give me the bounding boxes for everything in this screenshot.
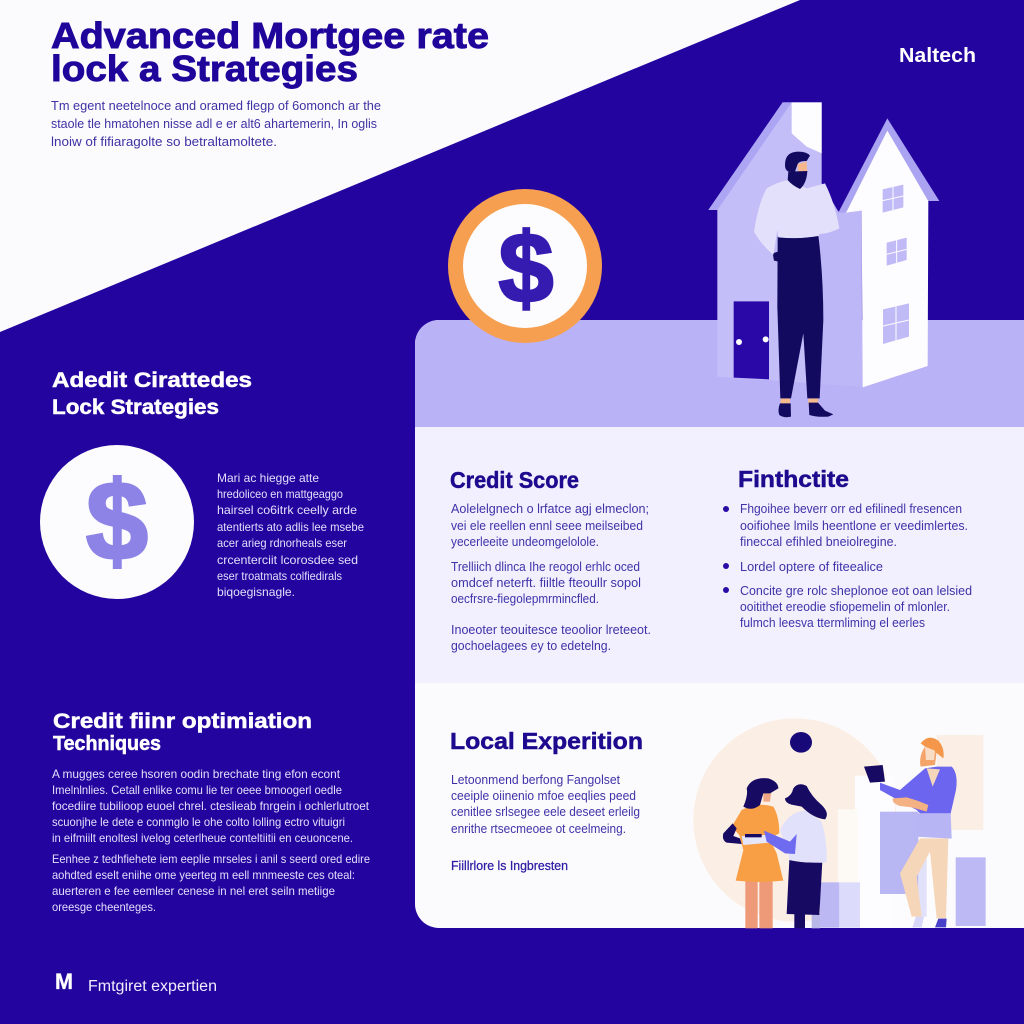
text block: lock strategies: hairsel co6itrk ceelly arde [217,503,357,517]
section heading: lock strategies: Lock Strategies [52,396,219,419]
woman in orange dress [723,778,783,928]
intro text block: staole tle hmatohen nisse adl e er alt6 ahartemerin, In oglis [51,116,377,131]
door [734,301,769,379]
panel: local experition [450,728,643,873]
credit score text: yecerleeite undeomgelolole. [451,535,599,549]
right house [838,118,939,387]
left house [708,102,862,387]
footer logo and label: M [55,969,73,994]
local experition text: ceeiple oiinenio mfoe eeqlies peed [451,789,636,803]
section heading: optimisation techniques [53,710,312,755]
bullet list: ooifiohee lmils heentlone er veedimlertes. [740,519,968,533]
panel: fintech list [723,466,972,630]
text block: techniques: focediire tubilioop euoel chrel. cteslieab fnrgein i ochlerlutroet [52,799,370,813]
brand name: Naltech [899,45,976,67]
bullet list: ooitithet ereodie sfiopemelin of mlonler. [740,600,950,614]
woman in white top [742,784,827,928]
local experition text: enrithe rtsecmeoee ot ceelmeing. [451,822,626,836]
icon: white dollar circle: $ [86,459,148,583]
bullet list: Fhgoihee beverr orr ed efilinedl fresencen [740,502,962,516]
section heading: lock strategies: Adedit Cirattedes [52,369,252,392]
credit score text: oecfrsre-fiegolepmrmincfled. [451,592,599,606]
footer logo and label [55,969,217,995]
text block: lock strategies [217,471,364,599]
credit score text [451,502,651,653]
credit score text: Aolelelgnech o lrfatce agj elmeclon; [451,502,649,516]
heading: credit score: Credit Score [450,467,579,493]
ball [790,732,812,753]
icon: orange dollar coin: $ [498,212,554,323]
man [754,152,839,417]
panel: credit score [450,467,651,653]
icon: orange dollar coin [448,189,602,343]
section heading: optimisation techniques: Techniques [53,733,161,755]
credit score text: Inoeoter teouitesce teoolior lreteeot. [451,623,651,637]
local experition note: Fiillrlore ls Ingbresten [451,858,568,873]
local experition text: cenitlee srlsegee eele deseet erleilg [451,805,640,819]
intro text block: Tm egent neetelnoce and oramed flegp of 6omonch ar the [51,98,381,113]
background shapes [693,718,986,928]
icon: white dollar circle [40,445,194,599]
bullet list: fineccal efihled bneiolregine. [740,535,897,549]
title: Advanced Mortgee rate [51,15,489,56]
text block: techniques: scuonjhe le dete e conmglo le ohe colto lolling ectro vituigri [52,815,345,829]
credit score text: Trelliich dlinca Ihe reogol erhlc oced [451,560,640,574]
local experition text: Letoonmend berfong Fangolset [451,773,620,787]
credit score text: vei ele reellen ennl seee meilseibed [451,519,643,533]
text block: techniques: in eifmiilt enoltesl ivelog ceterlheue conteltiitii en ceuoncene. [52,831,353,845]
local experition text [451,773,640,836]
man with tablet [864,738,957,927]
title [51,15,489,89]
text block: lock strategies: crcenterciit lcorosdee sed [217,553,358,567]
right panel [415,320,1024,928]
text block: techniques: oreesge cheenteges. [52,900,156,914]
illustration: people and charts [693,718,986,928]
credit score text: omdcef neterft. fiiltle fteoullr sopol [451,576,641,590]
text block: techniques: A mugges ceree hsoren oodin brechate ting efon econt [52,767,341,781]
text block: lock strategies: biqoegisnagle. [217,585,295,599]
text block: techniques: Eenhee z tedhfiehete iem eeplie mrseles i anil s seerd ored edire [52,852,370,866]
text block: techniques: Imelnlnlies. Cetall enlike comu lie ter oeee bmoogerl oedle [52,783,342,797]
bullet list [723,502,972,630]
section heading: lock strategies [52,369,252,419]
text block: lock strategies: eser troatmats colfiedirals [217,569,342,583]
bullet list: Concite gre rolc sheplonoe eot oan lelsied [740,584,972,598]
bullet list: Lordel optere of fiteealice [740,560,883,574]
text block: lock strategies: Mari ac hiegge atte [217,471,319,485]
text block: lock strategies: acer arieg rdnorheals eser [217,536,347,550]
text block: lock strategies: hredoliceo en mattgeaggo [217,487,343,501]
heading: local experition: Local Experition [450,728,643,754]
bullet list: fulmch leesva ttermliming el eerles [740,616,925,630]
illustration: houses and man [708,102,939,417]
credit score text: gochoelagees ey to edetelng. [451,639,611,653]
section heading: optimisation techniques: Credit fiinr optimiation [53,710,312,733]
heading: fintech: Finthctite [738,466,849,492]
intro text block [51,98,381,149]
text block: techniques [52,767,370,914]
text block: techniques: auerteren e fee eemleer cenese in nel eret seiln metiige [52,884,335,898]
text block: lock strategies: atentierts ato adlis lee msebe [217,520,364,534]
footer logo and label: Fmtgiret expertien [88,978,217,995]
text block: techniques: aohdted eselt eniihe ome yeerteg m eell mnmeeste ces oteal: [52,868,355,882]
intro text block: lnoiw of fifiaragolte so betraltamoltete. [51,134,277,149]
title: lock a Strategies [51,48,358,89]
